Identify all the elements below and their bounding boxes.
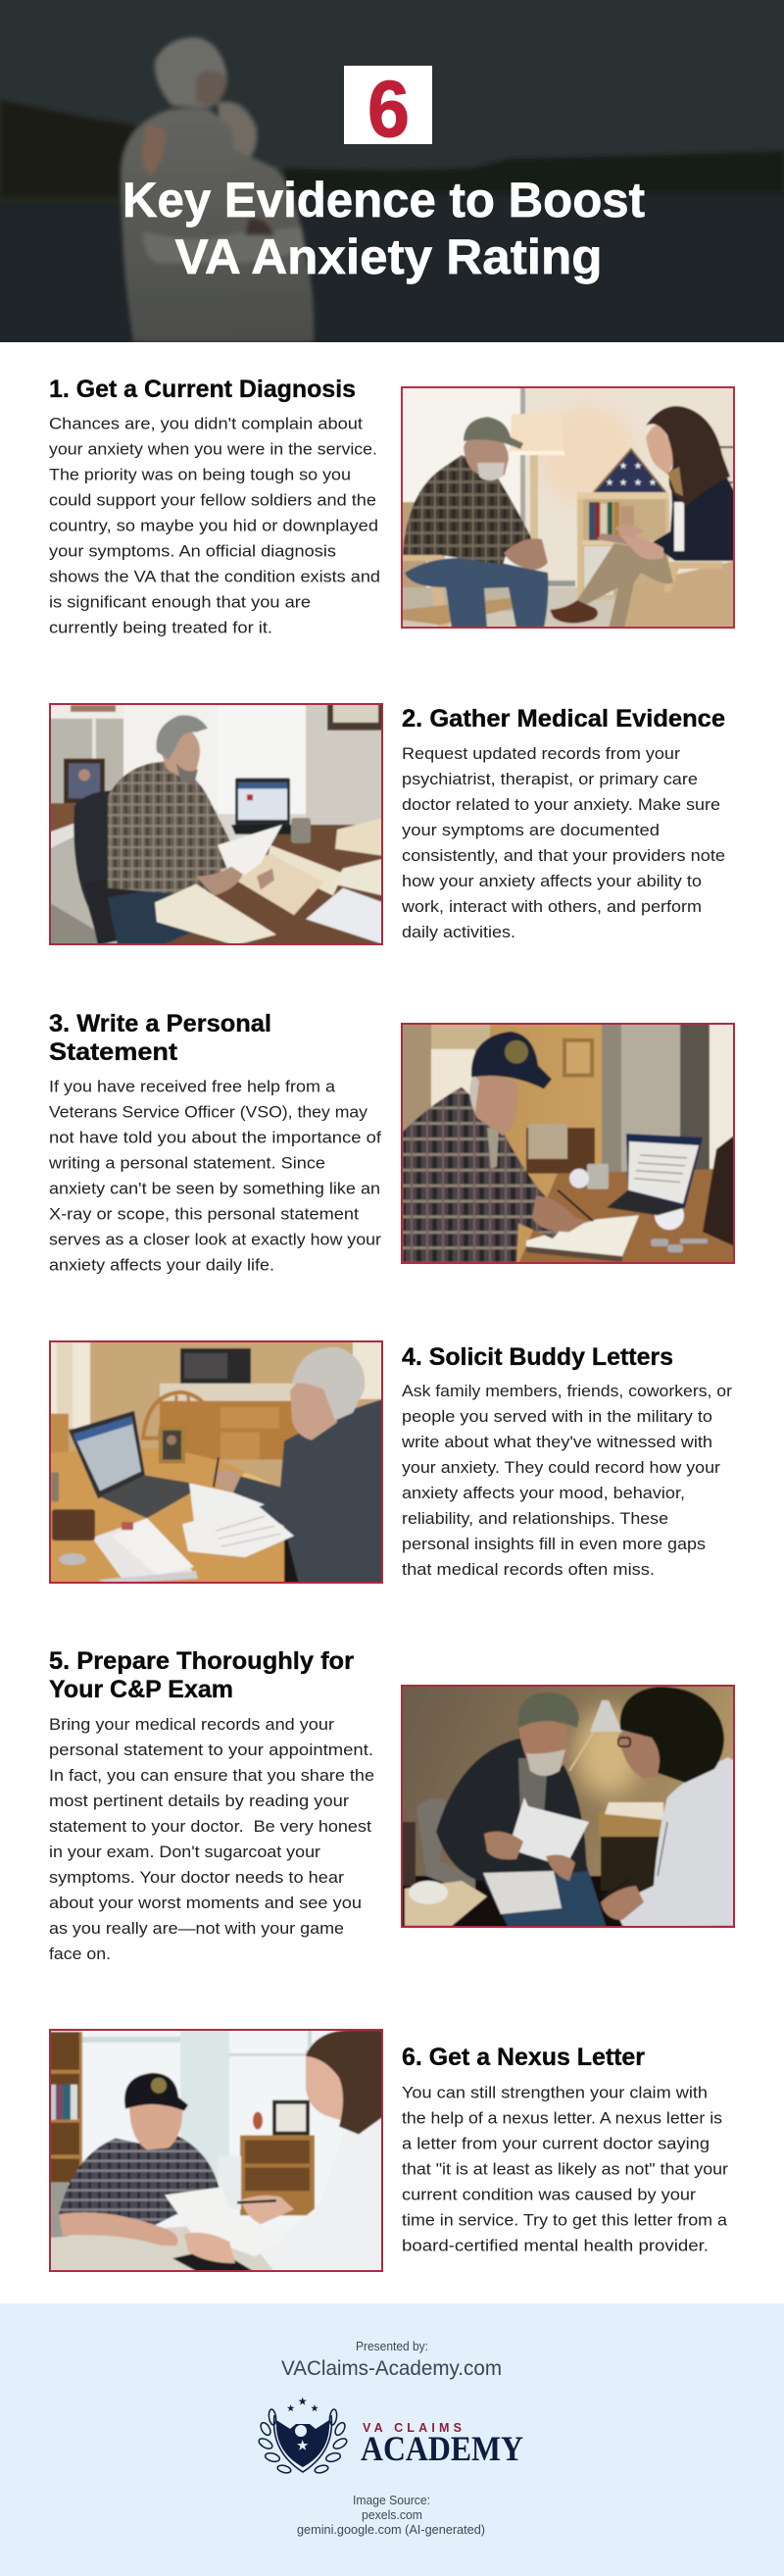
chair	[416, 1798, 475, 1895]
papers	[511, 1797, 589, 1867]
man shirt	[403, 455, 531, 565]
hands and clipboard	[597, 533, 641, 546]
body text 5: most pertinent details by reading your	[49, 1793, 350, 1810]
image source credits	[297, 2493, 485, 2537]
body text 3: anxiety affects your daily life.	[49, 1257, 274, 1275]
frame right	[703, 1135, 735, 1246]
body text 2: consistently, and that your providers note	[402, 847, 725, 865]
body text 1: The priority was on being tough so you	[49, 467, 351, 484]
section 5: Prepare Thoroughly for Your C&P Exam	[49, 1647, 735, 1963]
sofa foreground	[621, 561, 735, 629]
body text 4: that medical records often miss.	[402, 1561, 655, 1579]
main title: Key Evidence to Boost	[122, 173, 645, 227]
table	[49, 1448, 312, 1584]
body text 3: Veterans Service Officer (VSO), they may	[49, 1104, 368, 1122]
image source credits: Image Source:	[353, 2493, 430, 2507]
logo: VA Claims Academy	[258, 2397, 523, 2474]
section 1: Get a Current Diagnosis	[49, 376, 735, 637]
hero photo: couple by a lake at dusk	[0, 0, 784, 342]
head	[290, 1380, 337, 1440]
woman blazer	[651, 470, 735, 561]
body text 3: anxiety can't be seen by something like an	[49, 1181, 380, 1198]
body text 5	[49, 1716, 374, 1963]
doctor coat	[253, 2115, 383, 2272]
heading 5: 5. Prepare Thoroughly for	[49, 1647, 354, 1675]
body text 4	[401, 1383, 733, 1579]
photo: older man writing letters at kitchen table	[49, 1340, 383, 1584]
body text 5: in your exam. Don't sugarcoat your	[49, 1844, 321, 1861]
body text 6	[402, 2085, 729, 2255]
body text 6: that "it is at least as likely as not" that your	[402, 2161, 729, 2179]
chair	[49, 2182, 69, 2241]
table	[49, 2224, 294, 2272]
presented by: Presented by:	[356, 2339, 428, 2353]
heading 6: 6. Get a Nexus Letter	[402, 2044, 645, 2071]
man head	[129, 2105, 182, 2150]
head	[470, 1075, 518, 1136]
heading 4: 4. Solicit Buddy Letters	[402, 1343, 673, 1371]
frame and shelf	[272, 2100, 310, 2136]
framed photo	[64, 759, 105, 803]
heading 3	[49, 1010, 271, 1066]
man shirt	[59, 2137, 221, 2229]
body text 6: current condition was caused by your	[402, 2187, 697, 2204]
body text 3: X-ray or scope, this personal statement	[49, 1206, 359, 1224]
chair	[143, 1392, 218, 1439]
body text 5: about your worst moments and see you	[49, 1894, 362, 1912]
body text 2: how your anxiety affects your ability to	[402, 873, 702, 890]
section 3: Write a Personal Statement	[48, 1010, 735, 1275]
heading 2: 2. Gather Medical Evidence	[402, 705, 725, 732]
arm	[143, 227, 306, 263]
body text 4: anxiety affects your mood, behavior,	[402, 1485, 685, 1502]
photo: veteran talking with counselor	[401, 386, 735, 629]
letter	[165, 2187, 290, 2256]
folders	[267, 845, 343, 895]
body text 6: the help of a nexus letter. A nexus letter is	[402, 2110, 722, 2128]
body text 5: Bring your medical records and your	[49, 1716, 335, 1734]
body text 2: work, interact with others, and perform	[401, 898, 702, 916]
mug	[291, 818, 311, 843]
doctor head	[306, 2050, 345, 2122]
section 2: Gather Medical Evidence	[49, 703, 725, 945]
woman	[218, 102, 314, 342]
mug	[587, 1164, 609, 1189]
laptop	[69, 1411, 145, 1498]
man head	[155, 37, 227, 108]
desk	[599, 1800, 663, 1837]
body text 1: is significant enough that you are	[49, 594, 311, 612]
section 4: Solicit Buddy Letters	[49, 1340, 733, 1584]
jacket	[436, 1739, 587, 1881]
photo: man reviewing medical folders at desk	[49, 703, 383, 945]
body text 4: your anxiety. They could record how your	[402, 1459, 721, 1477]
main title: VA Anxiety Rating	[174, 229, 602, 284]
body text 4: write about what they've witnessed with	[401, 1434, 712, 1451]
body text 1: could support your fellow soldiers and the	[49, 492, 376, 510]
body text 6: time in service. Try to get this letter from a	[402, 2212, 728, 2230]
logo wordmark: VA CLAIMS	[363, 2421, 462, 2435]
doctor hands	[601, 1886, 644, 1920]
body text 1: country, so maybe you hid or downplayed	[49, 518, 378, 535]
man torso	[225, 1399, 383, 1584]
letters	[189, 1483, 265, 1522]
face	[464, 434, 509, 480]
footer panel	[0, 2303, 784, 2576]
body text 1	[49, 416, 380, 637]
body text 1: shows the VA that the condition exists and	[49, 569, 380, 586]
body text 3: not have told you about the importance of	[49, 1130, 381, 1147]
paper in hand	[218, 825, 282, 884]
body text 3: If you have received free help from a	[49, 1079, 336, 1096]
header banner	[0, 0, 784, 342]
desk	[49, 803, 76, 833]
photo frame on table	[159, 1427, 185, 1463]
envelopes	[92, 1518, 196, 1581]
doctor head	[618, 1724, 670, 1779]
lamp	[574, 1709, 643, 1797]
body text 6: You can still strengthen your claim with	[402, 2085, 708, 2102]
body text 5: symptoms. Your doctor needs to hear	[49, 1869, 345, 1887]
image source credits: pexels.com	[362, 2507, 422, 2522]
body text 5: face on.	[49, 1945, 111, 1963]
main title	[122, 173, 645, 284]
bookshelf	[49, 2032, 82, 2183]
heading 3: 3. Write a Personal	[49, 1010, 271, 1037]
table	[518, 1169, 735, 1264]
body text 5: as you really are—not with your game	[49, 1920, 344, 1938]
jeans	[479, 1866, 607, 1928]
microwave	[180, 1348, 251, 1386]
body text 5: statement to your doctor. Be very honest	[49, 1818, 371, 1836]
man arms	[59, 2212, 178, 2246]
body text 2	[401, 745, 725, 941]
hands	[504, 538, 548, 570]
body text 1: your symptoms. An official diagnosis	[49, 543, 336, 561]
hand	[532, 1196, 587, 1232]
wallet	[52, 1509, 95, 1541]
body text 5: personal statement to your appointment.	[49, 1742, 373, 1759]
photo: veteran and doctor with nexus letter	[49, 2029, 383, 2272]
icon: eagle crest	[258, 2397, 348, 2474]
body text 4: Ask family members, friends, coworkers, or	[402, 1383, 733, 1400]
cap	[124, 2073, 188, 2111]
number badge	[344, 65, 432, 154]
photo: veteran writing statement at table	[401, 1023, 735, 1264]
section 6: Get a Nexus Letter	[49, 2029, 729, 2272]
body text 2: your symptoms are documented	[402, 822, 660, 839]
notebook	[526, 1215, 639, 1256]
photo: veteran with doctor at C&P exam	[401, 1685, 735, 1928]
body text 6: a letter from your current doctor saying	[402, 2136, 710, 2153]
body text 4: personal insights fill in even more gaps	[402, 1536, 706, 1553]
clipboard	[172, 2248, 255, 2272]
woman trousers	[577, 543, 673, 629]
body text 1: currently being treated for it.	[49, 620, 272, 637]
doctor coat	[618, 1757, 735, 1928]
shirt	[108, 762, 237, 895]
laptop	[235, 778, 290, 827]
shirt	[403, 1086, 567, 1264]
image source credits: gemini.google.com (AI-generated)	[297, 2522, 485, 2537]
sofa	[526, 1128, 595, 1174]
logo wordmark: ACADEMY	[361, 2429, 523, 2468]
hands	[484, 1832, 523, 1859]
chair	[74, 790, 114, 941]
heading 5: Your C&P Exam	[49, 1676, 233, 1703]
body text 4: people you served with in the military to	[402, 1408, 712, 1426]
website: VAClaims-Academy.com	[281, 2357, 502, 2380]
hand and pen	[241, 2196, 294, 2224]
body text 3	[48, 1079, 382, 1275]
head	[159, 731, 200, 781]
folded flag case	[592, 449, 667, 494]
man chair	[401, 502, 426, 592]
body text 6: board-certified mental health provider.	[402, 2238, 709, 2255]
man	[122, 108, 239, 342]
body text 4: reliability, and relationships. These	[402, 1510, 668, 1528]
cabinets	[160, 1401, 346, 1460]
heading 3: Statement	[49, 1038, 178, 1066]
laptop	[626, 1134, 703, 1207]
cap	[471, 1032, 552, 1088]
number badge: 6	[368, 65, 410, 154]
body text 2: doctor related to your anxiety. Make sure	[402, 796, 720, 814]
head	[518, 1718, 567, 1775]
body text 3: writing a personal statement. Since	[48, 1155, 325, 1173]
jeans	[108, 879, 216, 945]
body text 2: daily activities.	[402, 924, 515, 941]
woman face and hair	[646, 425, 677, 475]
crumpled paper	[569, 1169, 589, 1188]
tissue tray	[405, 1881, 487, 1926]
body text 2: Request updated records from your	[402, 745, 681, 763]
dog tags	[651, 1238, 708, 1252]
dark lower right	[284, 1526, 383, 1584]
body text 2: psychiatrist, therapist, or primary care	[402, 771, 698, 788]
body text 3: serves as a closer look at exactly how your	[49, 1232, 382, 1249]
body text 5: In fact, you can ensure that you share the	[49, 1767, 374, 1785]
heading 5	[49, 1647, 354, 1703]
hand	[143, 126, 167, 175]
heading 1: 1. Get a Current Diagnosis	[49, 376, 356, 403]
body text 1: Chances are, you didn't complain about	[49, 416, 363, 433]
man jeans	[405, 558, 549, 629]
body text 1: your anxiety when you were in the service.	[49, 441, 377, 459]
